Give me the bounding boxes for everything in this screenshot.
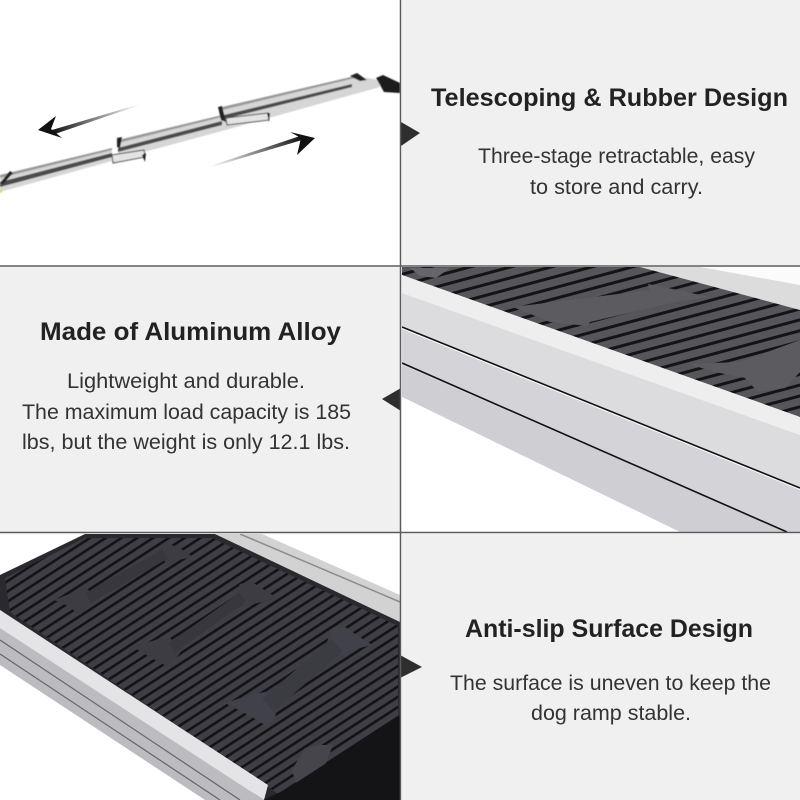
bone mark: top left (410, 268, 450, 278)
text: aluminum description: The maximum load capacity is 185 (22, 401, 351, 424)
dark lower end cap (263, 715, 400, 800)
text: anti-slip description: The surface is uneven to keep the (450, 672, 771, 695)
heading: aluminum: Made of Aluminum Alloy (40, 318, 341, 346)
text: telescoping description: to store and carry. (530, 176, 703, 199)
text: anti-slip description (450, 672, 771, 725)
bone mark: upper (513, 284, 710, 326)
photo: rubber anti-slip surface (0, 534, 400, 800)
photo: aluminum rail close-up (402, 267, 800, 532)
panel: anti-slip text background (402, 534, 800, 800)
pointer: top row triangle (401, 122, 420, 146)
arrow: pointing right (210, 132, 315, 167)
pointer: bottom row triangle (400, 655, 422, 678)
bone mark: left (54, 543, 193, 615)
heading: telescoping: Telescoping & Rubber Design (431, 84, 788, 112)
text: telescoping description: Three-stage retractable, easy (478, 145, 755, 168)
bone mark: center (133, 582, 277, 667)
rubber end tab (292, 745, 333, 783)
panel: aluminum text background (0, 267, 400, 532)
photo: retracted telescoping ramp (0, 73, 400, 193)
text: anti-slip description: dog ramp stable. (531, 702, 691, 725)
text: telescoping description (478, 145, 755, 199)
heading: anti-slip: Anti-slip Surface Design (465, 615, 753, 643)
bone mark: lower right (698, 340, 800, 389)
panel: telescoping text background (402, 0, 800, 265)
text: aluminum description: lbs, but the weight is only 12.1 lbs. (22, 431, 350, 454)
text: aluminum description: Lightweight and durable. (67, 370, 305, 393)
text: aluminum description (22, 370, 351, 454)
arrow: pointing left (38, 104, 140, 138)
pointer: middle row triangle (382, 388, 401, 411)
bone mark: right (225, 627, 372, 727)
